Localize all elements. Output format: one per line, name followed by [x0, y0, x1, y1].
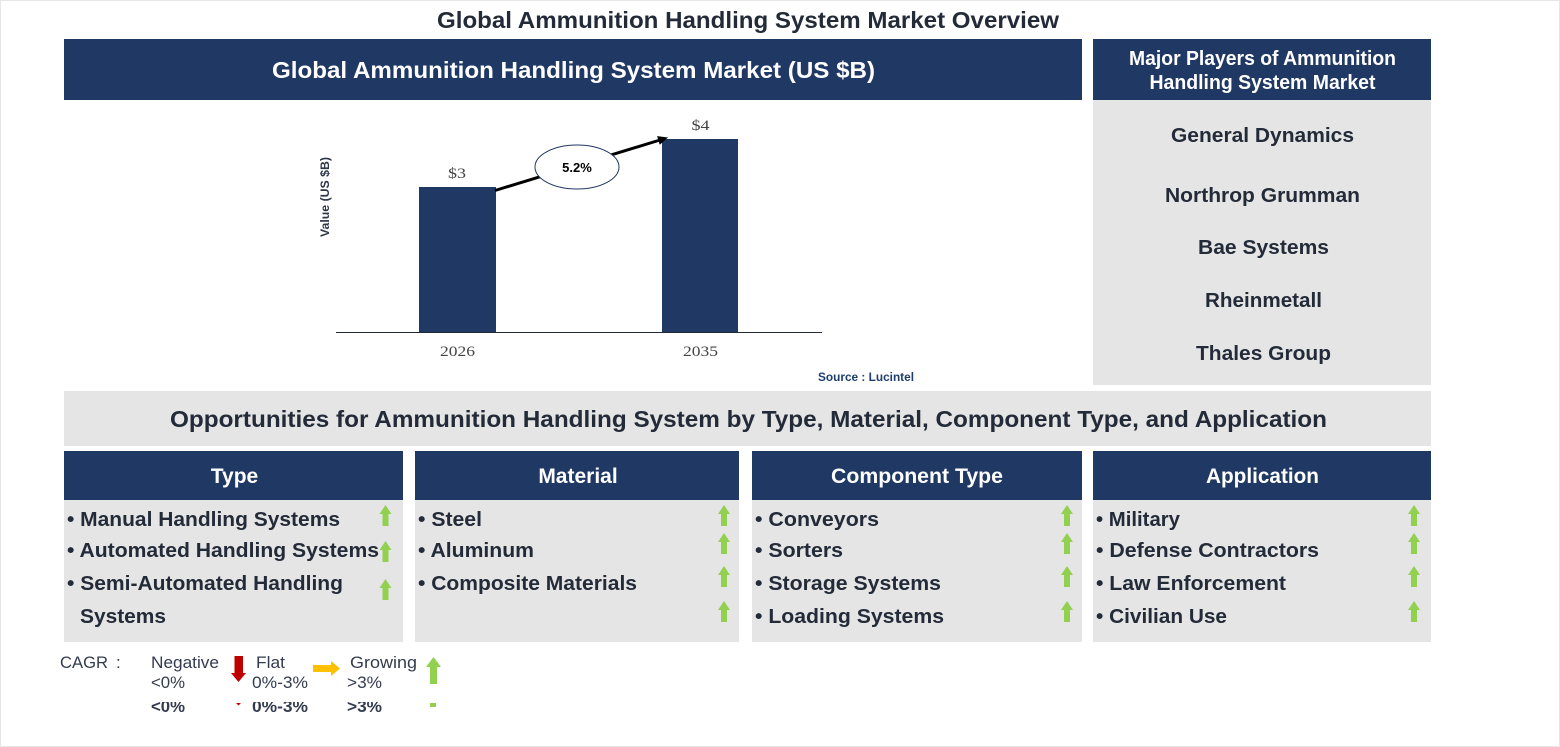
bar 2035 [662, 139, 738, 332]
legend: CAGR: CAGR [60, 653, 108, 672]
player names: Rheinmetall [1205, 289, 1322, 312]
material items [418, 509, 637, 595]
major players header: Handling System Market [1150, 72, 1376, 94]
bar chart [318, 118, 822, 360]
material items: • Steel [418, 509, 482, 531]
clipped legend row [152, 702, 436, 712]
player names [1165, 124, 1360, 365]
legend: CAGR [60, 656, 441, 712]
application items: • Military [1096, 509, 1181, 531]
type arrows [380, 505, 392, 600]
major players header [1093, 39, 1431, 100]
type items: • Semi-Automated Handling [67, 573, 343, 595]
panel: market chart header: Global Ammunition Handling System Market (US $B) [272, 57, 875, 83]
component items [755, 509, 944, 628]
component items: • Storage Systems [755, 573, 941, 595]
panel: market chart header [64, 39, 1082, 100]
clipped legend row: <0% [151, 697, 185, 716]
type items: • Automated Handling Systems [67, 540, 379, 562]
player names: Bae Systems [1198, 236, 1329, 259]
bar 2026 [419, 187, 496, 332]
legend: CAGR: : [116, 653, 121, 672]
component arrows [1061, 505, 1073, 622]
value label 2035: $4 [692, 118, 710, 134]
application items: • Civilian Use [1096, 606, 1227, 628]
type items: Systems [80, 606, 166, 628]
type items [67, 509, 379, 628]
player names: Thales Group [1196, 342, 1331, 365]
application items: • Law Enforcement [1096, 573, 1286, 595]
opportunities heading [64, 391, 1431, 446]
component items: • Loading Systems [755, 606, 944, 628]
panel: component type: Component Type [831, 465, 1003, 488]
component items: • Conveyors [755, 509, 879, 531]
icon: yellow right arrow [313, 661, 340, 676]
opportunities heading: Opportunities for Ammunition Handling System by Type, Material, Component Type, and Application [170, 406, 1327, 432]
type items: • Manual Handling Systems [67, 509, 340, 531]
clipped legend row: >3% [347, 697, 382, 716]
panel: type: Type [211, 465, 258, 488]
CAGR ellipse [535, 145, 619, 189]
player names: General Dynamics [1171, 124, 1354, 147]
panel: component type [752, 451, 1082, 642]
legend: CAGR: Negative [151, 653, 219, 672]
material items: • Composite Materials [418, 573, 637, 595]
panel: major players [1093, 39, 1431, 385]
title: Global Ammunition Handling System Market Overview [437, 7, 1060, 33]
clipped legend row: 0%-3% [252, 697, 308, 716]
panel: material: Material [538, 465, 618, 488]
application arrows [1408, 505, 1420, 622]
panel: application [1093, 451, 1431, 642]
legend: CAGR: 0%-3% [252, 673, 308, 692]
panel: material [415, 451, 739, 642]
legend: CAGR: <0% [151, 673, 185, 692]
legend: CAGR: Growing [350, 653, 417, 672]
year label 2026: 2026 [440, 344, 476, 360]
legend: CAGR: Flat [256, 653, 285, 672]
y axis label: Value (US $B) [318, 157, 332, 237]
application items [1096, 509, 1319, 628]
application items: • Defense Contractors [1096, 540, 1319, 562]
CAGR ellipse: 5.2% [562, 160, 592, 175]
player names: Northrop Grumman [1165, 184, 1360, 207]
panel: type [64, 451, 403, 642]
component items: • Sorters [755, 540, 843, 562]
material arrows [718, 505, 730, 622]
material items: • Aluminum [418, 540, 534, 562]
year label 2035: 2035 [683, 344, 718, 360]
panel: application: Application [1206, 465, 1319, 488]
icon: red down arrow [231, 656, 246, 682]
value label 2026: $3 [448, 166, 466, 182]
icon: green up arrow [426, 657, 441, 684]
legend: CAGR: >3% [347, 673, 382, 692]
growth arrow [495, 136, 668, 190]
major players header: Major Players of Ammunition [1129, 48, 1396, 70]
source note: Source : Lucintel [818, 370, 914, 384]
